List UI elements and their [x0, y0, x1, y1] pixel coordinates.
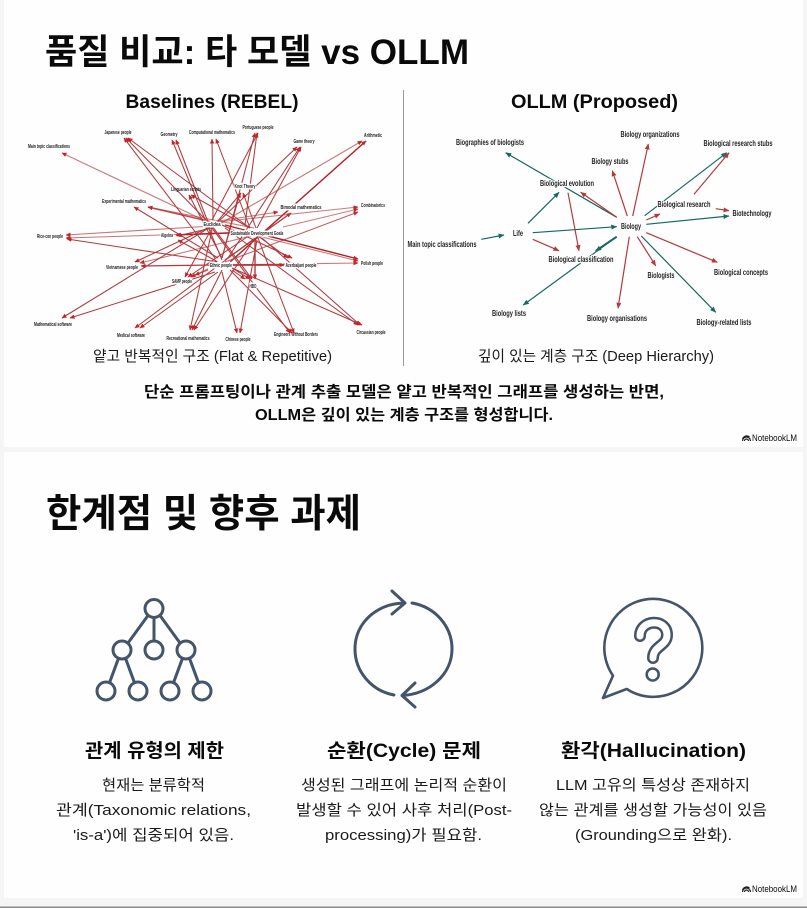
- chart: baseline REBEL graph: Circassian people: [356, 330, 386, 336]
- chart: baseline REBEL graph: Knot Theory: [234, 184, 256, 190]
- chart: baseline REBEL graph: Polish people: [361, 261, 383, 267]
- title: quality comparison: 품질 비교: 타 모델 vs OLLM: [45, 33, 469, 72]
- icon: question speech bubble: [603, 599, 702, 698]
- text: hallucination description: 않는 관계를 생성할 가능성이 있음: [539, 802, 767, 819]
- chart: baseline REBEL graph: Mathematical software: [34, 322, 72, 328]
- text block: comparison summary: OLLM은 깊이 있는 계층 구조를 형성합니다.: [255, 406, 553, 424]
- text: relation type limits description: 'is-a')에 집중되어 있음.: [73, 827, 234, 844]
- heading: hallucination: 환각(Hallucination): [561, 740, 746, 762]
- chart: baseline REBEL graph: Rice-con people: [37, 234, 63, 240]
- text block: comparison summary: 단순 프롬프팅이나 관계 추출 모델은 얕고 반복적인 그래프를 생성하는 반면,: [144, 383, 664, 401]
- chart: OLLM graph: Biologists: [648, 271, 675, 280]
- panel: limitations and future work: [4, 452, 803, 898]
- text: cycle problem description: processing)가 필요함.: [325, 827, 482, 844]
- chart: OLLM graph: [408, 130, 773, 327]
- chart: baseline REBEL graph: Combinatorics: [361, 203, 385, 209]
- chart: baseline REBEL graph: Ethnic people: [210, 263, 232, 269]
- chart: OLLM graph: Biographies of biologists: [456, 138, 524, 147]
- chart: baseline REBEL graph: Vietnamese people: [106, 265, 138, 271]
- chart: baseline REBEL graph: Main topic classifications: [28, 144, 70, 150]
- text: hallucination description: LLM 고유의 특성상 존재하지: [556, 777, 750, 794]
- chart: baseline REBEL graph: Geometry: [160, 132, 178, 138]
- chart: OLLM graph: Biological classification: [548, 255, 614, 264]
- text: cycle problem description: [296, 777, 512, 844]
- caption: deep hierarchy: 깊이 있는 계층 구조 (Deep Hierarchy): [478, 348, 714, 365]
- chart: OLLM graph: Biology organizations: [620, 130, 680, 139]
- chart: OLLM graph: Biology organisations: [587, 314, 647, 323]
- text: relation type limits description: 관계(Taxonomic relations,: [56, 802, 251, 819]
- chart: baseline REBEL graph: Recreational mathematics: [166, 336, 210, 342]
- heading: cycle problem: 순환(Cycle) 문제: [327, 740, 481, 762]
- chart: OLLM graph: Biological research stubs: [704, 139, 773, 148]
- text block: comparison summary: [144, 383, 664, 424]
- heading: relation type limits: 관계 유형의 제한: [85, 740, 224, 762]
- chart: baseline REBEL graph: Sustainable Development Goals: [230, 231, 284, 237]
- logo: NotebookLM top: NotebookLM: [752, 433, 797, 444]
- text: hallucination description: (Grounding으로 완화).: [575, 827, 732, 844]
- column: relation type limits: [56, 600, 251, 844]
- column: cycle problem: [296, 591, 512, 844]
- text: cycle problem description: 생성된 그래프에 논리적 순환이: [301, 777, 507, 794]
- chart: OLLM graph: Biology stubs: [592, 157, 629, 166]
- chart: OLLM graph: Main topic classifications: [408, 240, 477, 249]
- caption: flat and repetitive: 얕고 반복적인 구조 (Flat & Repetitive): [93, 348, 332, 365]
- chart: baseline REBEL graph: Medical software: [117, 333, 145, 339]
- chart: baseline REBEL graph: HBO: [250, 284, 257, 290]
- chart: OLLM graph: Biology lists: [492, 309, 526, 318]
- text: relation type limits description: [56, 777, 251, 844]
- panel: quality comparison: [4, 0, 803, 447]
- title: limitations and future work: 한계점 및 향후 과제: [46, 493, 361, 536]
- chart: baseline REBEL graph: Bimodal mathematics: [280, 205, 322, 211]
- logo: NotebookLM bottom: NotebookLM: [752, 884, 797, 895]
- chart: baseline REBEL graph: Chinese people: [226, 337, 250, 343]
- chart: baseline REBEL graph: Linguarian scripts: [171, 187, 201, 193]
- chart: baseline REBEL graph: SAMP people: [172, 279, 192, 285]
- text: cycle problem description: 발생할 수 있어 사후 처리(Post-: [296, 802, 512, 819]
- chart: OLLM graph: Biological research: [658, 200, 711, 209]
- chart: OLLM graph: Biological concepts: [714, 268, 768, 277]
- chart: baseline REBEL graph: Euclidea: [204, 222, 221, 228]
- chart: OLLM graph: Biological evolution: [540, 179, 594, 188]
- chart: baseline REBEL graph: Portuguese people: [242, 125, 274, 131]
- icon: cycle arrows: [355, 591, 452, 707]
- chart: baseline REBEL graph: [28, 125, 386, 343]
- chart: baseline REBEL graph: Azerbaijani people: [286, 263, 316, 269]
- chart: OLLM graph: Biotechnology: [732, 209, 772, 218]
- chart: baseline REBEL graph: Game theory: [294, 139, 315, 145]
- heading: Baselines (REBEL): Baselines (REBEL): [126, 92, 298, 113]
- chart: baseline REBEL graph: Japanese people: [104, 130, 132, 136]
- icon: hierarchy tree: [97, 600, 211, 700]
- chart: baseline REBEL graph: Engineers Without Borders: [274, 332, 318, 338]
- text: hallucination description: [539, 777, 767, 844]
- chart: baseline REBEL graph: Algebra: [161, 233, 174, 239]
- chart: OLLM graph: Biology-related lists: [696, 318, 752, 327]
- chart: baseline REBEL graph: Arithmetic: [364, 133, 382, 139]
- heading: OLLM (Proposed): OLLM (Proposed): [511, 92, 678, 113]
- chart: baseline REBEL graph: Experimental mathematics: [102, 199, 146, 205]
- column: hallucination: [539, 599, 767, 844]
- text: relation type limits description: 현재는 분류학적: [102, 777, 205, 794]
- chart: OLLM graph: Life: [513, 229, 523, 238]
- chart: baseline REBEL graph: Computational mathematics: [189, 130, 235, 136]
- chart: OLLM graph: Biology: [621, 222, 641, 231]
